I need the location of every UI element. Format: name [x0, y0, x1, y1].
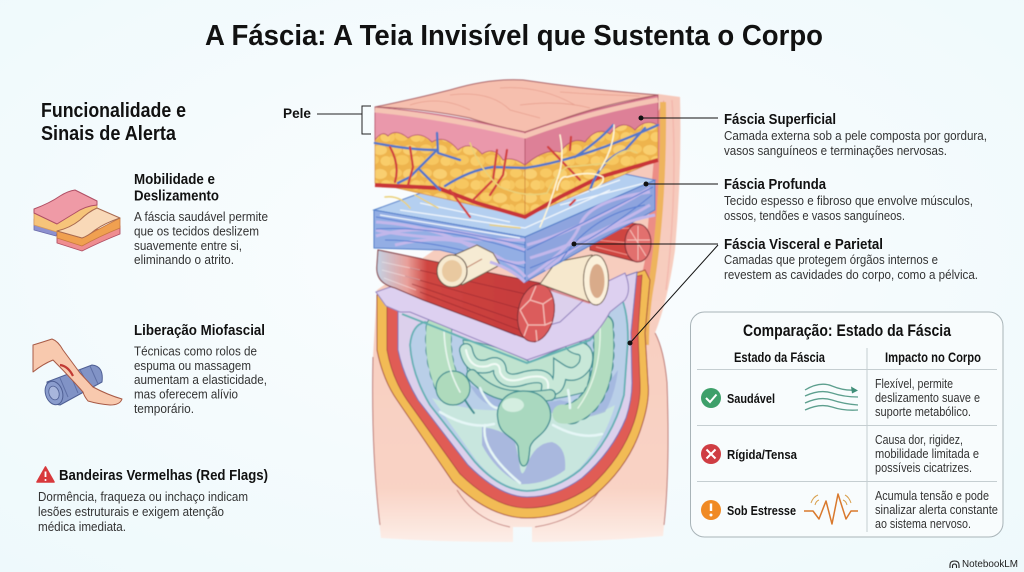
red vessel: [375, 160, 658, 217]
anatomy illustration: [373, 80, 680, 542]
row: Saudável: Saudável: [727, 391, 775, 406]
row: Sob Estresse: Sob Estresse: [727, 503, 796, 518]
text: Liberação Miofascial: Técnicas como rolos de: [134, 344, 257, 358]
icon: foam roller and leg: [33, 339, 122, 407]
skin top surface: [375, 80, 658, 132]
row: Rígida/Tensa: [701, 433, 979, 475]
small intestine loops: [466, 330, 586, 389]
text: red flags: médica imediata.: [38, 520, 126, 534]
text: red flags: Bandeiras Vermelhas (Red Flags): [59, 468, 268, 484]
column headers: Impacto no Corpo: [885, 350, 981, 365]
text: Liberação Miofascial: [134, 323, 267, 416]
text: Fáscia Profunda: Tecido espesso e fibroso que envolve músculos,: [724, 194, 973, 208]
text: Fáscia Profunda: Fáscia Profunda: [724, 177, 827, 193]
text: Fáscia Superficial: Fáscia Superficial: [724, 112, 836, 128]
row: Sob Estresse: ao sistema nervoso.: [875, 517, 971, 531]
ascending colon: [436, 325, 604, 483]
text: Liberação Miofascial: mas oferecem alívio: [134, 388, 238, 402]
column headers: Estado da Fáscia: [734, 350, 825, 365]
icon: warning triangle: [37, 467, 54, 482]
comparison heading: Comparação: Estado da Fáscia: [743, 322, 952, 340]
left heading: [41, 100, 186, 145]
text: red flags: [38, 468, 268, 534]
text: Mobilidade e Deslizamento: Deslizamento: [134, 188, 219, 204]
text: Fáscia Superficial: Camada externa sob a pele composta por gordura,: [724, 129, 987, 143]
text: Mobilidade e Deslizamento: [134, 172, 268, 267]
pelvic cavity: [410, 290, 628, 491]
text: Mobilidade e Deslizamento: suavemente entre si,: [134, 239, 242, 253]
row: Sob Estresse: sinalizar alerta constante: [875, 503, 998, 517]
lower left muscle: [377, 250, 545, 342]
row: Saudável: [701, 377, 980, 419]
text: Fáscia Profunda: ossos, tendões e vasos sanguíneos.: [724, 209, 905, 223]
row: Saudável: Flexível, permite: [875, 377, 953, 391]
left heading: Sinais de Alerta: [41, 123, 177, 145]
bladder: [497, 391, 551, 466]
ligaments: [480, 388, 570, 408]
bone left: [450, 245, 500, 285]
row: Saudável: deslizamento suave e: [875, 391, 980, 405]
text: Mobilidade e Deslizamento: eliminando o atrito.: [134, 253, 234, 267]
descending colon: [562, 325, 604, 414]
row: Sob Estresse: Acumula tensão e pode: [875, 489, 989, 503]
muscle end: [513, 281, 559, 345]
text: Fáscia Visceral e Parietal: Fáscia Visceral e Parietal: [724, 237, 883, 253]
abdominal wall: fat layer: [377, 270, 650, 518]
abdominal wall: muscle layer: [387, 275, 642, 508]
leader: deep fascia: [644, 182, 718, 186]
row: Saudável: suporte metabólico.: [875, 405, 971, 419]
row: Rígida/Tensa: Causa dor, rigidez,: [875, 433, 963, 447]
NotebookLM logo: NotebookLM: [962, 558, 1018, 570]
text: red flags: Dormência, fraqueza ou inchaço indicam: [38, 490, 248, 504]
text: Fáscia Visceral e Parietal: Camadas que protegem órgãos internos e: [724, 253, 938, 267]
row: Sob Estresse: [701, 489, 998, 531]
text: Mobilidade e Deslizamento: A fáscia saudável permite: [134, 210, 268, 224]
leader: visceral fascia lower: [628, 245, 718, 346]
column headers: [734, 350, 981, 365]
right wall band: [636, 100, 664, 340]
blue and red vessels: [375, 125, 658, 228]
leader: superficial fascia: [638, 116, 718, 120]
small intestine base: [463, 338, 590, 400]
text: Fáscia Profunda: [724, 177, 973, 223]
body skin: [373, 94, 680, 542]
text: Fáscia Visceral e Parietal: [724, 237, 978, 282]
row: Rígida/Tensa: mobilidade limitada e: [875, 447, 979, 461]
text: Fáscia Superficial: [724, 112, 987, 158]
text: Liberação Miofascial: temporário.: [134, 402, 194, 416]
text: red flags: lesões estruturais e exigem atenção: [38, 505, 224, 519]
parietal fascia lining: [398, 272, 637, 497]
leader: visceral fascia upper: [572, 242, 718, 246]
text: Fáscia Superficial: vasos sanguíneos e terminações nervosas.: [724, 144, 947, 158]
bone right: [540, 255, 597, 305]
row: Rígida/Tensa: possíveis cicatrizes.: [875, 461, 972, 475]
text: Mobilidade e Deslizamento: Mobilidade e: [134, 172, 215, 188]
deep fascia: [374, 173, 655, 237]
text: Liberação Miofascial: aumentam a elasticidade,: [134, 373, 267, 387]
upper right muscle: [590, 222, 638, 262]
row: Rígida/Tensa: Rígida/Tensa: [727, 447, 798, 462]
text: Liberação Miofascial: Liberação Miofascial: [134, 323, 265, 339]
panel: comparison table: [690, 312, 1003, 537]
text: Mobilidade e Deslizamento: que os tecidos deslizem: [134, 224, 259, 238]
title: A Fáscia: A Teia Invisível que Sustenta o Corpo: [205, 20, 823, 52]
icon: sliding tissue layers: [34, 190, 120, 251]
fat layer front: [375, 125, 525, 217]
text: Liberação Miofascial: espuma ou massagem: [134, 359, 251, 373]
text: Fáscia Visceral e Parietal: revestem as cavidades do corpo, como a pélvica.: [724, 268, 978, 282]
label: Pele: [283, 106, 371, 134]
label: Pele: Pele: [283, 106, 311, 121]
left heading: Funcionalidade e: [41, 100, 186, 122]
visceral fold: [376, 273, 628, 360]
skin front: [375, 107, 525, 165]
